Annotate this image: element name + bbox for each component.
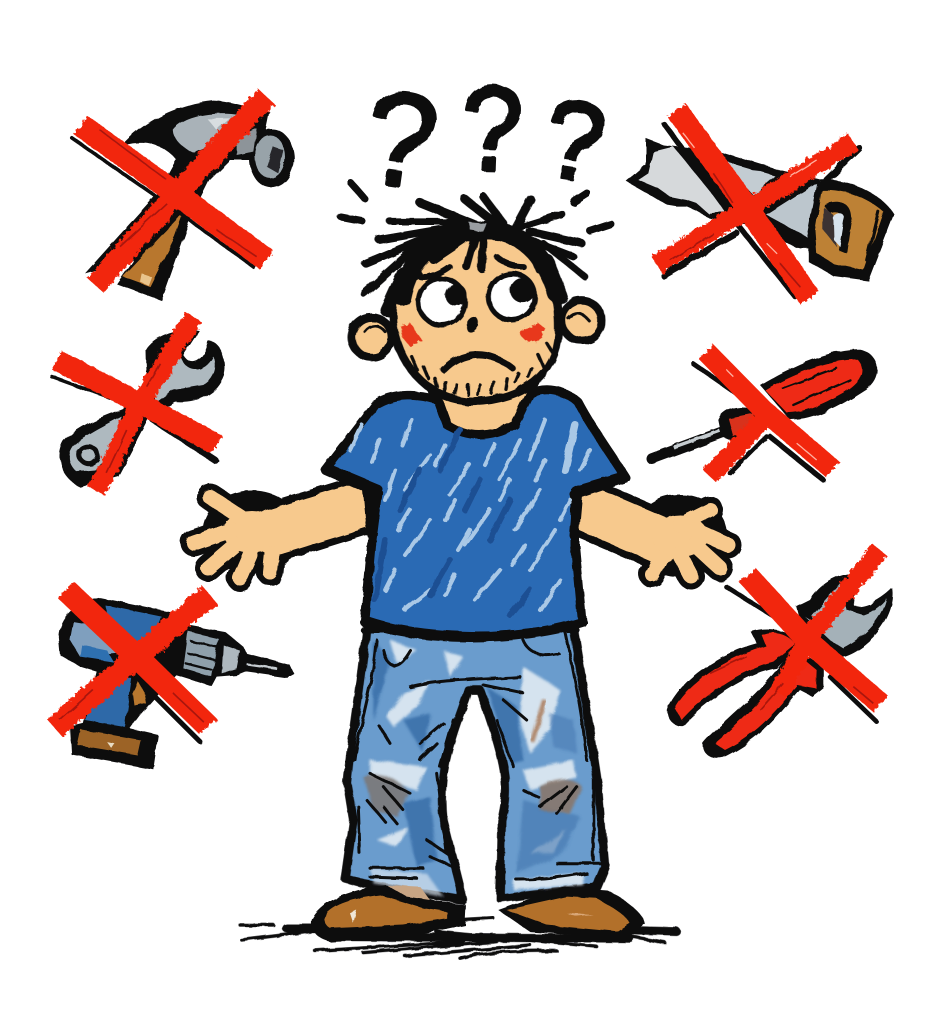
head (352, 196, 602, 402)
character (194, 196, 728, 958)
neck (430, 385, 535, 435)
eyebrows (420, 257, 523, 277)
stains on knees (363, 774, 410, 817)
cheek scribbles (401, 323, 422, 347)
question marks: ? (356, 62, 446, 218)
ears (352, 317, 392, 357)
surprise lines (341, 183, 611, 231)
stubble (412, 343, 552, 395)
red X (693, 352, 833, 480)
shoes (311, 885, 644, 942)
mouth (444, 355, 513, 370)
red X (657, 110, 859, 298)
blue t-shirt (325, 390, 626, 637)
red X (72, 97, 267, 285)
hair (364, 196, 585, 310)
face (393, 236, 558, 402)
tool: screwdriver crossed out (652, 349, 877, 480)
tool: pliers crossed out (667, 550, 893, 758)
tool: drill crossed out (55, 590, 294, 769)
tool: wrench crossed out (52, 317, 225, 492)
question marks: ? (459, 62, 525, 197)
jeans (345, 627, 605, 900)
question marks (356, 62, 613, 218)
red X (55, 590, 210, 742)
tool: saw crossed out (627, 110, 894, 298)
tool: hammer crossed out (72, 97, 294, 301)
nose (464, 315, 481, 335)
left arm and hand (194, 497, 362, 578)
red X (710, 550, 881, 722)
question marks: ? (537, 75, 613, 208)
jeans creases (355, 630, 603, 880)
eyes (418, 278, 465, 325)
ground scribbles (240, 918, 677, 958)
right arm and hand (590, 508, 728, 576)
red X (52, 317, 217, 492)
